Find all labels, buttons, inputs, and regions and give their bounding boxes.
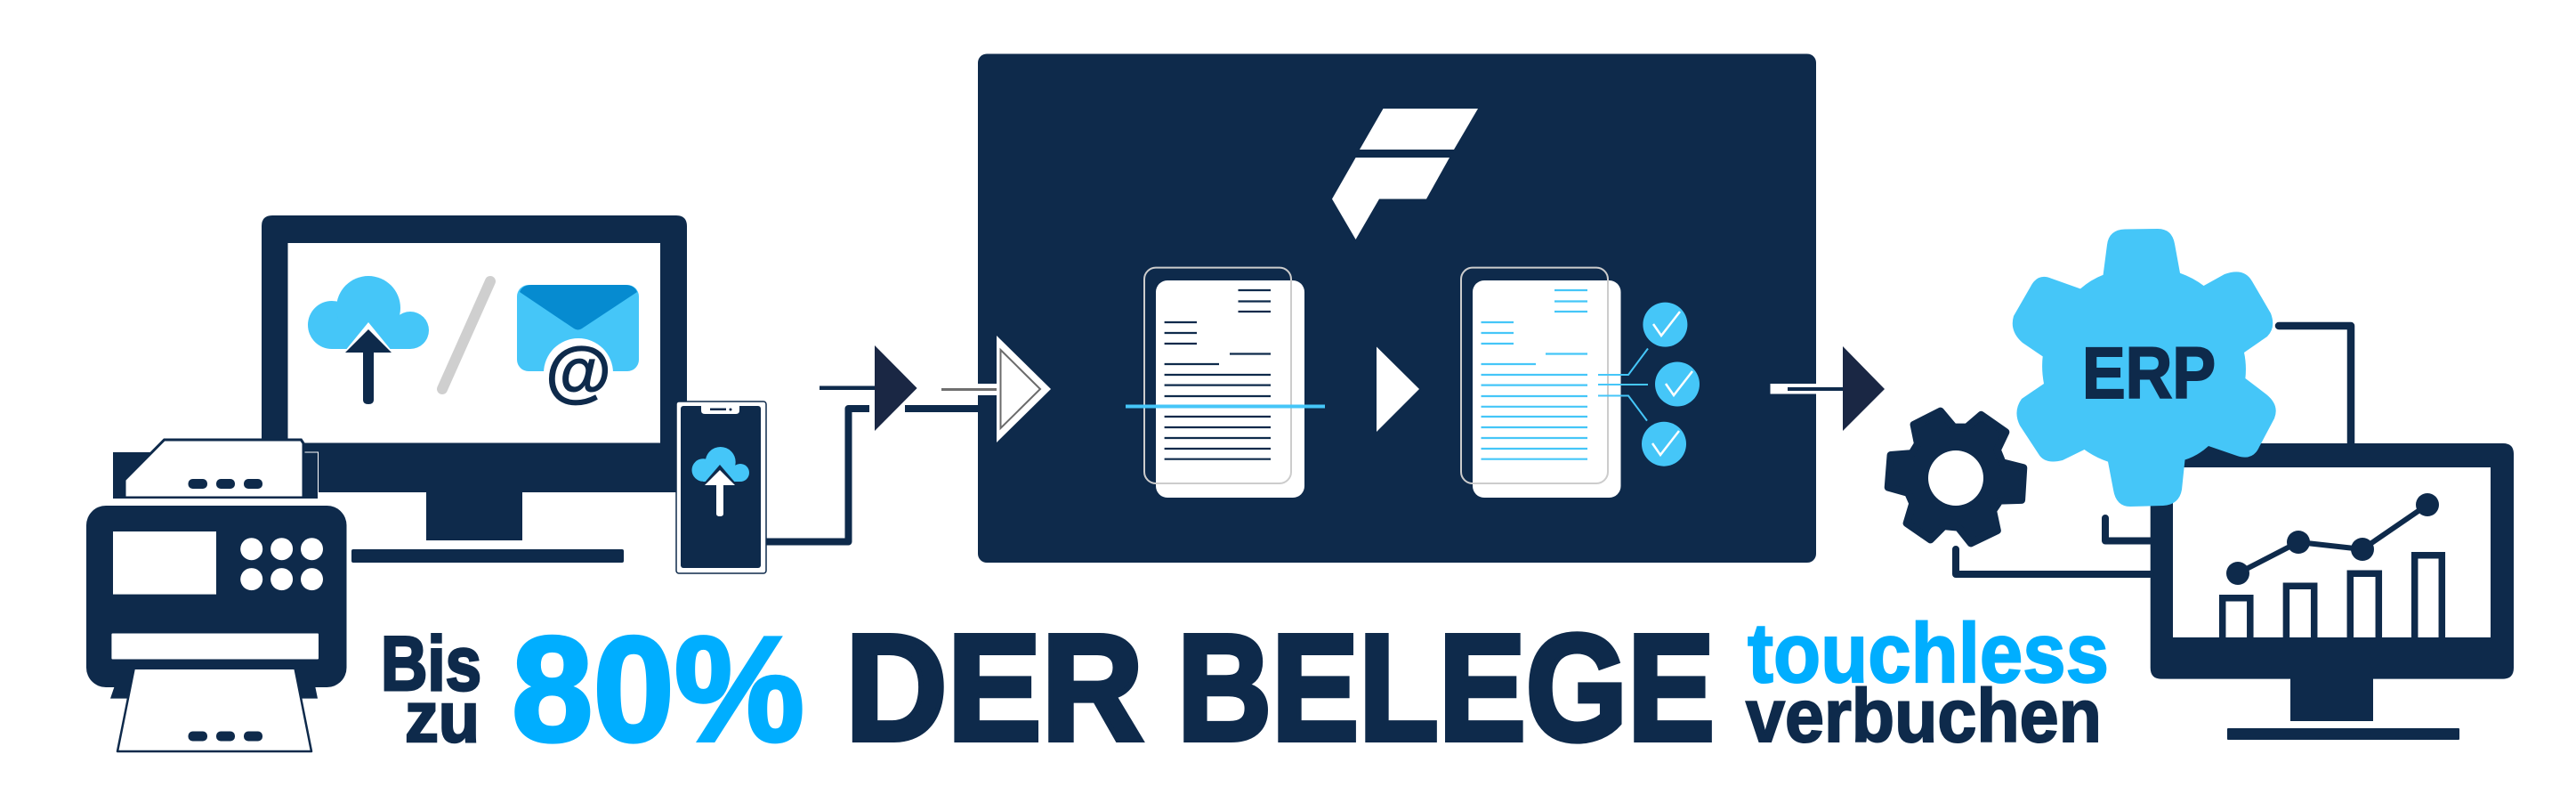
connector: monitor into first arrow [820, 385, 876, 390]
bar chart [2223, 556, 2442, 637]
paper tray [117, 669, 311, 751]
connector: small gear to analytics monitor [1956, 549, 2151, 574]
scan line [1126, 404, 1325, 408]
line chart [2226, 493, 2439, 585]
separator slash [442, 281, 490, 389]
document: extracted invoice [1461, 268, 1621, 498]
text: touchless: touchless [1748, 606, 2109, 701]
connector: first arrow to panel [905, 405, 978, 412]
heading: Bis zu 80% der Belege touchless verbuchen [381, 604, 2109, 773]
text: 80%: 80% [512, 605, 804, 773]
printer body [86, 506, 347, 687]
icon: email envelope with at sign: @ [545, 334, 611, 410]
text: verbuchen: verbuchen [1746, 674, 2102, 758]
arrow: between documents [1377, 347, 1419, 432]
arrow: to ERP [1843, 346, 1885, 431]
icon: analytics monitor [2151, 443, 2514, 740]
connector: panel to ERP arrow [1788, 387, 1845, 391]
label: ERP: ERP [2082, 333, 2216, 414]
scanner top [125, 440, 303, 498]
icon: smartphone with cloud upload [676, 402, 766, 573]
text: BELEGE: BELEGE [1177, 604, 1715, 773]
text: zu: zu [405, 677, 480, 757]
icon: check marks [1642, 303, 1700, 466]
validation links [1598, 349, 1648, 421]
text: Bis: Bis [381, 621, 481, 707]
arrow: first input arrow [875, 345, 917, 431]
icon: small gear [1888, 411, 2023, 543]
text: DER: DER [845, 604, 1143, 773]
icon: ERP gear [2013, 229, 2276, 507]
exit notch [1771, 384, 1817, 393]
connector: ERP gear to analytics monitor [2279, 326, 2351, 443]
panel: processing [978, 53, 1817, 563]
arrow: panel entry [941, 336, 1051, 442]
icon: email envelope with at sign [517, 285, 639, 410]
document: scanned invoice [1126, 268, 1325, 498]
connector: ERP gear bottom to analytics monitor [2105, 518, 2151, 541]
icon: scanner / printer [86, 440, 347, 751]
icon: cloud upload [308, 276, 429, 404]
icon: logo [1332, 109, 1478, 239]
icon: desktop monitor with upload and email [262, 215, 687, 563]
connector: phone to first arrow [766, 409, 869, 541]
